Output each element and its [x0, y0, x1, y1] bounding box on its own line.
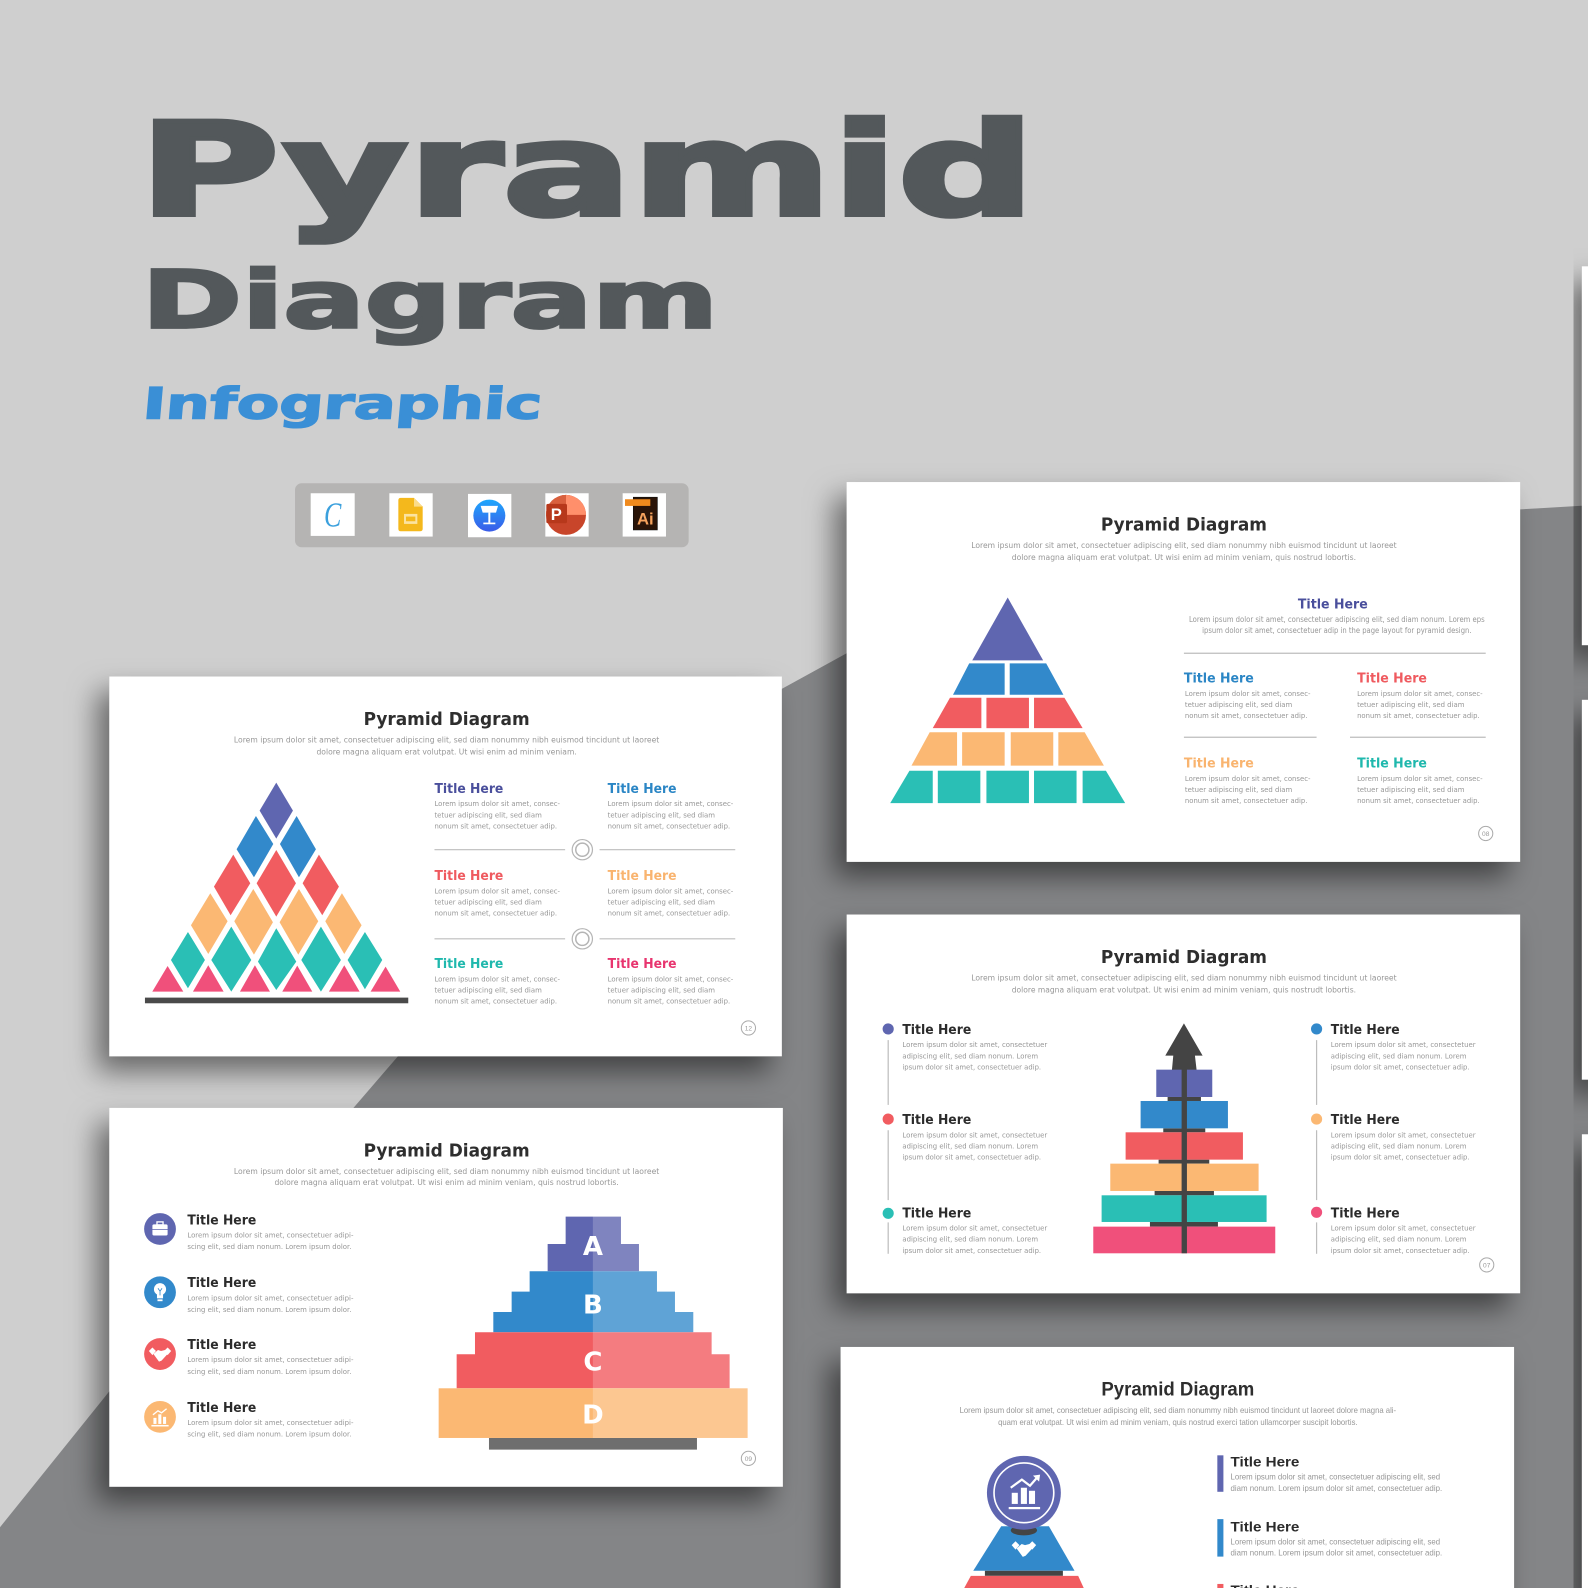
text block: teal — [1357, 757, 1483, 805]
chart: arrow pyramid — [1093, 1023, 1275, 1253]
chart: stepped pyramid A B C D: A — [583, 1232, 603, 1262]
text block: blue: Lorem ipsum dolor sit amet, consec- — [1185, 689, 1311, 698]
text block: right 3: Title Here — [1331, 1206, 1400, 1221]
text block: red — [1357, 672, 1483, 720]
text block: left 2: ipsum dolor sit amet, consectetuer adip. — [902, 1153, 1041, 1162]
icon: Canva: C — [324, 497, 342, 535]
text block: left 1: ipsum dolor sit amet, consectetuer adip. — [902, 1062, 1041, 1071]
subtitle: Infographic: Infographic — [141, 379, 544, 429]
text block: teal: Title Here — [434, 957, 503, 972]
chart: diamond pyramid — [145, 783, 408, 1003]
text block: right 2 — [1311, 1113, 1476, 1162]
chart: stepped pyramid A B C D — [439, 1217, 748, 1450]
intro text: dolore magna aliquam erat volutpat. Ut wisi enim ad minim veniam, quis nostrud lobortis. — [274, 1178, 619, 1187]
text block: left 1 — [883, 1023, 1047, 1071]
text block: red: nonum sit amet, consectetuer adip. — [434, 909, 557, 918]
text block: orange: nonum sit amet, consectetuer adip. — [1185, 796, 1307, 805]
text block: orange: Title Here — [1184, 757, 1254, 772]
chart: icon pyramid — [963, 1456, 1085, 1588]
panel: right edge slides — [1582, 266, 1588, 1588]
text block: left 2: Title Here — [902, 1113, 971, 1128]
icon: PowerPoint — [545, 493, 589, 537]
text block: red: tetuer adipiscing elit, sed diam — [434, 897, 542, 906]
text block: item 1: Lorem ipsum dolor sit amet, consectetuer adipiscing elit, sed — [1230, 1473, 1440, 1482]
text block: teal: Lorem ipsum dolor sit amet, consec- — [434, 974, 560, 983]
intro text — [960, 1405, 1396, 1427]
panel: slide 12 diamond pyramid — [109, 677, 782, 1056]
text block: right 2: Title Here — [1331, 1113, 1400, 1128]
timeline lines — [888, 1040, 1317, 1254]
icon: handshake — [1012, 1541, 1036, 1557]
text block: orange — [1184, 757, 1311, 805]
text block: red: nonum sit amet, consectetuer adip. — [1357, 711, 1480, 720]
page number — [741, 1451, 756, 1465]
text block: item 4: Lorem ipsum dolor sit amet, consectetuer adipi- — [187, 1418, 354, 1427]
text block: item 2: Title Here — [1230, 1519, 1299, 1535]
intro text: Lorem ipsum dolor sit amet, consectetuer adipiscing elit, sed diam nonummy nibh euismod tincidunt ut laoreet — [971, 541, 1397, 550]
text block: item 1: Title Here — [187, 1213, 256, 1228]
text block: teal: tetuer adipiscing elit, sed diam — [434, 985, 542, 994]
text block: blue: Lorem ipsum dolor sit amet, consec- — [608, 799, 734, 808]
text block: item 2: diam nonum. Lorem ipsum dolor sit amet, consectetuer adip. — [1230, 1549, 1442, 1558]
icon: briefcase — [144, 1213, 176, 1245]
text block: top: ipsum dolor sit amet, consectetuer adip in the page layout for pyramid design. — [1202, 626, 1472, 635]
text block: right 1: Lorem ipsum dolor sit amet, consectetuer — [1331, 1040, 1476, 1049]
heading: Pyramid Diagram — [1101, 515, 1267, 536]
text block: right 2: Lorem ipsum dolor sit amet, consectetuer — [1331, 1130, 1476, 1139]
text block: left 2: Lorem ipsum dolor sit amet, consectetuer — [902, 1130, 1047, 1139]
chart: stepped pyramid A B C D: C — [583, 1347, 603, 1377]
text block: left 2 — [883, 1113, 1047, 1162]
intro text: dolore magna aliquam erat volutpat. Ut wisi enim ad minim veniam. — [316, 748, 577, 757]
icon: Canva — [311, 493, 355, 536]
page number: 12 — [745, 1025, 752, 1032]
text block: orange: nonum sit amet, consectetuer adip. — [608, 909, 730, 918]
text block: red: Lorem ipsum dolor sit amet, consec- — [1357, 689, 1483, 698]
text block: top — [1189, 598, 1485, 635]
intro text: quam erat volutpat. Ut wisi enim ad minim veniam, quis nostrud exerci tation ullamcorper suscipit lobortis. — [998, 1417, 1358, 1427]
page number — [1479, 826, 1493, 841]
heading: Pyramid Diagram — [1101, 1380, 1254, 1401]
panel: cropped bottom slide — [841, 1347, 1514, 1588]
text block: item 3 — [187, 1338, 354, 1376]
text block: red: Lorem ipsum dolor sit amet, consec- — [434, 886, 560, 895]
chart: segmented triangle pyramid — [890, 598, 1125, 803]
text block: item 2 — [1217, 1519, 1442, 1558]
page number: 08 — [1482, 831, 1490, 838]
text block: top: Lorem ipsum dolor sit amet, consectetuer adipiscing elit, sed diam nonum. Lorem eps — [1189, 615, 1485, 624]
text block: right 1: ipsum dolor sit amet, consectetuer adip. — [1331, 1062, 1470, 1071]
icon: handshake — [144, 1338, 176, 1370]
text block: orange: tetuer adipiscing elit, sed diam — [608, 897, 715, 906]
text block: teal: tetuer adipiscing elit, sed diam — [1357, 785, 1464, 794]
text block: blue: nonum sit amet, consectetuer adip. — [1185, 711, 1307, 720]
text block: pink — [608, 957, 734, 1006]
text block: left 3 — [883, 1206, 1047, 1255]
text block: red: Title Here — [434, 869, 503, 884]
text block: teal: nonum sit amet, consectetuer adip. — [1357, 796, 1480, 805]
text block: left 3: Title Here — [902, 1206, 971, 1221]
text block: orange: Lorem ipsum dolor sit amet, consec- — [608, 886, 734, 895]
text block: teal: Lorem ipsum dolor sit amet, consec- — [1357, 774, 1483, 783]
text block: item 3: scing elit, sed diam nonum. Lorem ipsum dolor. — [187, 1367, 351, 1376]
text block: right 3: ipsum dolor sit amet, consectetuer adip. — [1331, 1246, 1470, 1255]
text block: red: tetuer adipiscing elit, sed diam — [1357, 700, 1464, 709]
intro text: dolore magna aliquam erat volutpat. Ut wisi enim ad minim veniam, quis nostrud lobortis. — [1012, 553, 1356, 562]
text block: left 1: Lorem ipsum dolor sit amet, consectetuer — [902, 1040, 1047, 1049]
intro text: Lorem ipsum dolor sit amet, consectetuer adipiscing elit, sed diam nonummy nibh euismod tincidunt ut laoreet — [234, 1167, 659, 1176]
text block: pink: Lorem ipsum dolor sit amet, consec- — [608, 974, 734, 983]
text block: item 4: scing elit, sed diam nonum. Lorem ipsum dolor. — [187, 1430, 351, 1439]
icon: PowerPoint: P — [551, 505, 562, 524]
intro text — [971, 973, 1397, 994]
heading: Pyramid Diagram — [1101, 947, 1267, 968]
text block: right 2: adipiscing elit, sed diam nonum. Lorem — [1331, 1141, 1466, 1150]
text block: pink: Title Here — [608, 957, 677, 972]
text block: orange: Lorem ipsum dolor sit amet, consec- — [1185, 774, 1311, 783]
text block: left 1: Title Here — [902, 1023, 971, 1038]
icon: Illustrator — [623, 493, 666, 537]
icon: Illustrator: Ai — [637, 510, 654, 529]
text block: item 3: Title Here — [187, 1338, 256, 1353]
node marker — [572, 840, 592, 860]
intro text: Lorem ipsum dolor sit amet, consectetuer adipiscing elit, sed diam nonummy nibh euismod tincidunt ut laoreet dolore magna ali- — [960, 1405, 1396, 1415]
text block: right 3 — [1311, 1206, 1476, 1255]
text block: teal — [434, 957, 560, 1006]
text block: item 2: Title Here — [187, 1276, 256, 1291]
icon: growth chart — [1009, 1475, 1040, 1509]
text block: right 1: adipiscing elit, sed diam nonum. Lorem — [1331, 1051, 1466, 1060]
text block: blue: tetuer adipiscing elit, sed diam — [1185, 700, 1292, 709]
text block: blue — [1184, 672, 1311, 720]
text block: teal: Title Here — [1357, 757, 1427, 772]
text block: left 1: adipiscing elit, sed diam nonum. Lorem — [902, 1051, 1038, 1060]
text block: red — [434, 869, 560, 918]
title: Diagram: Diagram — [142, 255, 718, 347]
text block: orange — [608, 869, 734, 918]
intro text — [971, 541, 1397, 562]
chart: stepped pyramid A B C D: B — [583, 1291, 603, 1321]
heading: Pyramid Diagram — [364, 1141, 530, 1162]
text block: indigo: tetuer adipiscing elit, sed diam — [434, 810, 542, 819]
text block: pink: nonum sit amet, consectetuer adip. — [608, 997, 730, 1006]
text block: item 1: diam nonum. Lorem ipsum dolor sit amet, consectetuer adip. — [1230, 1484, 1442, 1493]
text block: blue — [608, 782, 734, 830]
panel: slide 09 stepped pyramid — [109, 1108, 783, 1487]
chart: stepped pyramid A B C D: D — [582, 1400, 604, 1430]
page number: 09 — [745, 1456, 752, 1463]
text block: orange: tetuer adipiscing elit, sed diam — [1185, 785, 1292, 794]
text block: right 1 — [1311, 1023, 1476, 1071]
text block: item 1 — [187, 1213, 354, 1251]
text block: indigo: Lorem ipsum dolor sit amet, consec- — [434, 799, 560, 808]
text block: blue: tetuer adipiscing elit, sed diam — [608, 810, 715, 819]
text block: left 3: Lorem ipsum dolor sit amet, consectetuer — [902, 1223, 1047, 1232]
icon: Google Slides — [389, 493, 433, 537]
text block: indigo: nonum sit amet, consectetuer adip. — [434, 821, 557, 830]
icon: light bulb — [144, 1276, 176, 1308]
text block: pink: tetuer adipiscing elit, sed diam — [608, 985, 715, 994]
page number — [741, 1021, 756, 1035]
heading: Pyramid Diagram — [364, 709, 530, 730]
page number: 07 — [1483, 1262, 1491, 1269]
text block: left 2: adipiscing elit, sed diam nonum. Lorem — [902, 1141, 1038, 1150]
text block: top: Title Here — [1298, 598, 1368, 613]
text block: item 4 — [187, 1401, 354, 1439]
page number — [1480, 1258, 1494, 1272]
text block: blue: Title Here — [608, 782, 677, 797]
text block: orange: Title Here — [608, 869, 677, 884]
text block: item 1: Lorem ipsum dolor sit amet, consectetuer adipi- — [187, 1231, 354, 1240]
text block: left 3: ipsum dolor sit amet, consectetuer adip. — [902, 1246, 1041, 1255]
text block: item 2 — [187, 1276, 354, 1314]
text block: right 1: Title Here — [1331, 1023, 1400, 1038]
text block: right 2: ipsum dolor sit amet, consectetuer adip. — [1331, 1153, 1470, 1162]
text block: item 2: scing elit, sed diam nonum. Lorem ipsum dolor. — [187, 1305, 351, 1314]
node marker — [572, 929, 592, 949]
text block: item 2: Lorem ipsum dolor sit amet, consectetuer adipi- — [187, 1293, 354, 1302]
icon: growth chart — [144, 1401, 176, 1433]
text block: blue: nonum sit amet, consectetuer adip. — [608, 821, 730, 830]
text block: right 3: Lorem ipsum dolor sit amet, consectetuer — [1331, 1223, 1476, 1232]
panel: slide 08 layered triangle — [847, 482, 1520, 862]
text block: right 3: adipiscing elit, sed diam nonum. Lorem — [1331, 1235, 1466, 1244]
text block: item 1: scing elit, sed diam nonum. Lorem ipsum dolor. — [187, 1242, 351, 1251]
text block: left 3: adipiscing elit, sed diam nonum. Lorem — [902, 1235, 1038, 1244]
intro text: Lorem ipsum dolor sit amet, consectetuer adipiscing elit, sed diam nonummy nibh euismod tincidunt ut laoreet — [234, 735, 659, 744]
text block: item 1: Title Here — [1230, 1454, 1299, 1470]
text block: indigo — [434, 782, 560, 830]
text block: item 2: Lorem ipsum dolor sit amet, consectetuer adipiscing elit, sed — [1230, 1537, 1440, 1546]
intro text: dolore magna aliquam erat volutpat. Ut wisi enim ad minim veniam, quis nostrudt lobortis. — [1012, 985, 1356, 994]
text block: item 4: Title Here — [187, 1401, 256, 1416]
intro text — [234, 1167, 659, 1187]
text block: item 1 — [1217, 1454, 1442, 1493]
text block: item 3: Lorem ipsum dolor sit amet, consectetuer adipi- — [187, 1355, 354, 1364]
title: Pyramid: Pyramid — [139, 97, 1035, 246]
text block: indigo: Title Here — [434, 782, 503, 797]
text block: blue: Title Here — [1184, 672, 1254, 687]
intro text — [234, 735, 659, 757]
text block: teal: nonum sit amet, consectetuer adip. — [434, 997, 557, 1006]
text block: red: Title Here — [1357, 672, 1427, 687]
software icon toolbar — [295, 483, 689, 547]
panel: slide 07 arrow pyramid — [847, 915, 1520, 1293]
intro text: Lorem ipsum dolor sit amet, consectetuer adipiscing elit, sed diam nonummy nibh euismod tincidunt ut laoreet — [971, 973, 1397, 982]
icon: Keynote — [468, 494, 511, 537]
